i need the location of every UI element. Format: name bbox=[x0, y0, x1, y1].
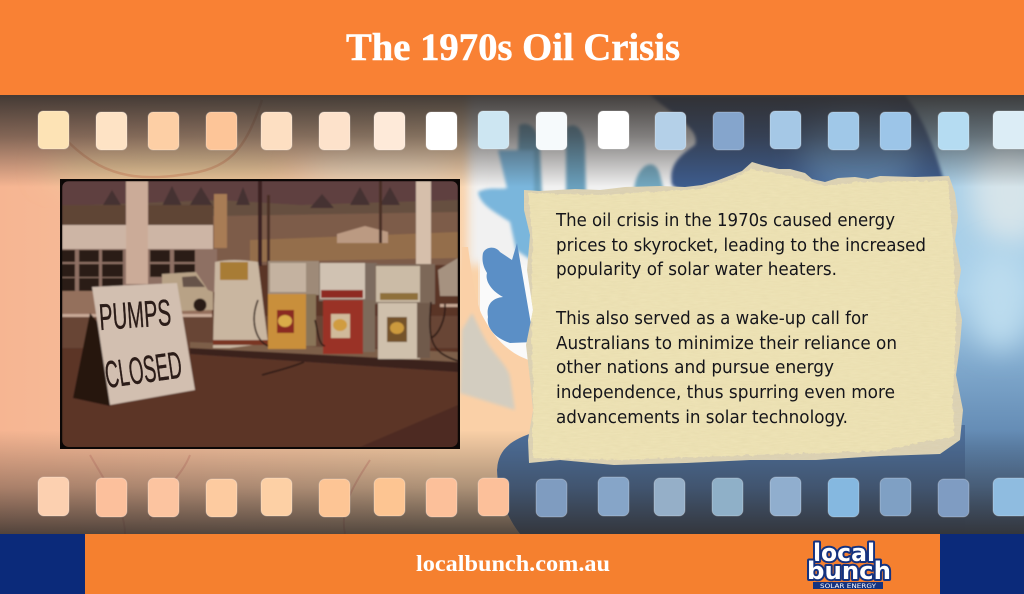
header band bbox=[0, 0, 1024, 95]
website url: localbunch.com.au bbox=[416, 551, 610, 576]
logo: local bunch solar energy: local bbox=[813, 539, 875, 567]
sign easel bbox=[73, 313, 112, 406]
logo: local bunch solar energy bbox=[807, 539, 891, 590]
paper text: first paragraph: popularity of solar water heaters. bbox=[556, 260, 837, 280]
paper text: second paragraph: other nations and pursue energy bbox=[556, 358, 834, 378]
peach wash left of note bbox=[462, 247, 533, 534]
sign text: PUMPS bbox=[98, 292, 172, 338]
paper text: second paragraph: Australians to minimize their reliance on bbox=[556, 334, 897, 354]
sign text: CLOSED bbox=[102, 345, 185, 397]
poles bbox=[126, 181, 148, 284]
logo: local bunch solar energy: bunch bbox=[807, 557, 891, 585]
paper text: first paragraph: prices to skyrocket, leading to the increased bbox=[556, 236, 926, 256]
paper text: first paragraph bbox=[555, 211, 926, 280]
paper text: first paragraph: The oil crisis in the 1970s caused energy bbox=[555, 211, 895, 231]
film strip: top perforations bbox=[38, 111, 1024, 150]
footer band bbox=[0, 534, 1024, 594]
logo: local bunch solar energy: SOLAR ENERGY bbox=[820, 583, 876, 590]
paper text: second paragraph: This also served as a wake-up call for bbox=[555, 309, 869, 329]
blue paint strokes bbox=[516, 124, 542, 195]
truck bbox=[162, 272, 213, 311]
lower dark blue wash bbox=[497, 425, 965, 534]
title: The 1970s Oil Crisis bbox=[346, 26, 680, 69]
film strip: bottom perforations bbox=[38, 477, 1024, 517]
pumps bbox=[213, 260, 268, 348]
torn paper note bbox=[515, 155, 970, 470]
background: watercolour film strip bbox=[0, 70, 1024, 534]
sign text bbox=[100, 299, 181, 388]
paper text: second paragraph bbox=[555, 309, 897, 428]
paper text: second paragraph: advancements in solar technology. bbox=[556, 408, 848, 428]
paper text: second paragraph: independence, thus spurring even more bbox=[556, 383, 895, 403]
photo: pumps closed at petrol station bbox=[60, 179, 460, 449]
